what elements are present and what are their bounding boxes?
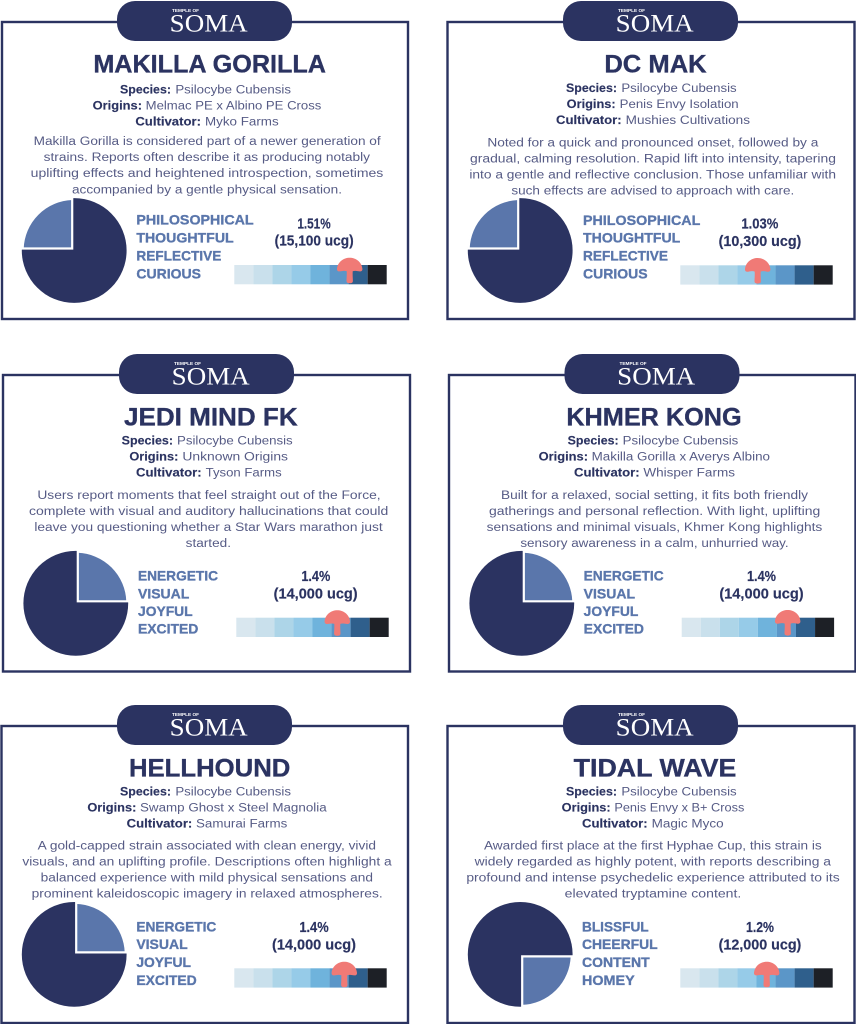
details: Psilocybe Cubensis bbox=[621, 785, 737, 799]
potency: (10,300 ucg) bbox=[719, 234, 802, 250]
effect tags: VISUAL bbox=[584, 585, 635, 601]
description: gradual, calming resolution. Rapid lift into intensity, tapering bbox=[470, 152, 836, 166]
details: Psilocybe Cubensis bbox=[623, 433, 738, 447]
description: prominent kaleidoscopic imagery in relaxed atmospheres. bbox=[32, 886, 383, 900]
effect tags: JOYFUL bbox=[136, 954, 191, 970]
title: KHMER KONG bbox=[566, 404, 742, 431]
details: Species: bbox=[120, 785, 171, 799]
logo: Temple of Soma: TEMPLE OF bbox=[174, 361, 201, 366]
description: Noted for a quick and pronounced onset, followed by a bbox=[487, 136, 818, 150]
icon: mushroom marker bbox=[754, 962, 779, 987]
effect tags: HOMEY bbox=[582, 972, 635, 988]
description: balanced experience with mild physical sensations and bbox=[41, 870, 373, 884]
description bbox=[22, 838, 392, 900]
effect tags bbox=[583, 212, 701, 281]
description: started. bbox=[186, 536, 231, 550]
logo: Temple of Soma: SOMA bbox=[617, 364, 695, 391]
description: gatherings and personal reflection. With light, uplifting bbox=[489, 504, 820, 518]
logo: Temple of Soma: SOMA bbox=[616, 11, 694, 38]
details bbox=[562, 785, 744, 831]
details: Mushies Cultivations bbox=[626, 113, 750, 127]
effect tags: REFLECTIVE bbox=[136, 248, 221, 264]
potency: 1.51% bbox=[297, 216, 331, 232]
details: Origins: bbox=[562, 801, 611, 815]
description: A gold-capped strain associated with clean energy, vivid bbox=[38, 838, 376, 852]
effect tags: VISUAL bbox=[138, 585, 190, 601]
pie chart bbox=[22, 902, 127, 1007]
details: Psilocybe Cubensis bbox=[177, 433, 293, 447]
details: Melmac PE x Albino PE Cross bbox=[146, 99, 321, 113]
details: Species: bbox=[568, 433, 619, 447]
logo: Temple of Soma: SOMA bbox=[170, 715, 248, 742]
effect tags: ENERGETIC bbox=[136, 918, 216, 934]
effect tags: REFLECTIVE bbox=[583, 248, 668, 264]
icon: mushroom marker bbox=[325, 610, 350, 636]
description: elevated tryptamine content. bbox=[565, 886, 741, 900]
details: Origins: bbox=[539, 449, 588, 463]
description bbox=[487, 488, 822, 550]
effect tags: CURIOUS bbox=[136, 265, 201, 281]
potency: (15,100 ucg) bbox=[275, 234, 354, 250]
pie chart bbox=[468, 902, 573, 1007]
effect tags: VISUAL bbox=[136, 936, 188, 952]
card border bbox=[3, 375, 410, 672]
details: Unknown Origins bbox=[182, 449, 288, 463]
panel: Khmer Kong bbox=[449, 354, 856, 672]
potency bbox=[719, 217, 802, 250]
logo: Temple of Soma bbox=[117, 705, 292, 745]
effect tags: JOYFUL bbox=[584, 603, 639, 619]
details: Swamp Ghost x Steel Magnolia bbox=[140, 801, 327, 815]
details: Psilocybe Cubensis bbox=[621, 81, 737, 95]
details: Psilocybe Cubensis bbox=[175, 785, 291, 799]
potency: 1.4% bbox=[747, 569, 776, 585]
effect tags: BLISSFUL bbox=[582, 918, 649, 934]
details: Penis Envy Isolation bbox=[620, 97, 739, 111]
details: Cultivator: bbox=[582, 817, 648, 831]
effect tags bbox=[136, 212, 254, 281]
card border bbox=[2, 726, 408, 1023]
logo: Temple of Soma: TEMPLE OF bbox=[618, 8, 645, 13]
effect tags: JOYFUL bbox=[138, 603, 193, 619]
details: Samurai Farms bbox=[196, 817, 287, 831]
effect tags: EXCITED bbox=[584, 621, 644, 637]
panel: Tidal Wave bbox=[448, 705, 854, 1023]
panel: Jedi Mind FK bbox=[3, 354, 410, 672]
card text bbox=[466, 755, 840, 988]
logo: Temple of Soma bbox=[563, 1, 738, 41]
details: Cultivator: bbox=[127, 817, 192, 831]
details: Origins: bbox=[129, 449, 178, 463]
potency scale bbox=[680, 968, 833, 988]
potency: 1.03% bbox=[741, 217, 779, 233]
pie chart bbox=[22, 198, 127, 303]
description: sensory awareness in a calm, unhurried way. bbox=[520, 536, 789, 550]
panel: Makilla Gorilla bbox=[2, 1, 408, 319]
potency bbox=[274, 569, 358, 602]
potency scale bbox=[234, 265, 387, 284]
potency scale bbox=[680, 265, 833, 285]
logo: Temple of Soma: TEMPLE OF bbox=[618, 712, 645, 717]
description: Makilla Gorilla is considered part of a newer generation of bbox=[34, 134, 381, 148]
potency scale bbox=[236, 618, 389, 637]
details: Whisper Farms bbox=[643, 465, 735, 479]
icon: mushroom marker bbox=[775, 610, 800, 636]
description: widely regarded as highly potent, with reports describing a bbox=[474, 854, 831, 868]
details: Cultivator: bbox=[136, 465, 202, 479]
details bbox=[93, 83, 321, 129]
description: visuals, and an uplifting profile. Descriptions often highlight a bbox=[22, 854, 392, 868]
potency bbox=[275, 216, 354, 250]
description: strains. Reports often describe it as producing notably bbox=[44, 150, 371, 164]
logo: Temple of Soma: TEMPLE OF bbox=[620, 361, 647, 366]
card border bbox=[449, 375, 856, 672]
potency scale bbox=[234, 968, 387, 988]
potency: (14,000 ucg) bbox=[719, 586, 804, 602]
icon: mushroom marker bbox=[337, 258, 362, 283]
effect tags: ENERGETIC bbox=[584, 567, 664, 583]
logo: Temple of Soma: TEMPLE OF bbox=[172, 8, 199, 13]
icon: mushroom marker bbox=[745, 258, 770, 284]
potency: (14,000 ucg) bbox=[274, 586, 358, 602]
effect tags bbox=[584, 567, 664, 637]
logo: Temple of Soma bbox=[117, 1, 292, 41]
details: Makilla Gorilla x Averys Albino bbox=[592, 449, 770, 463]
potency scale bbox=[682, 618, 834, 637]
details: Cultivator: bbox=[556, 113, 622, 127]
description bbox=[469, 136, 836, 198]
card border bbox=[448, 726, 854, 1023]
description: sensations and minimal visuals, Khmer Kong highlights bbox=[487, 520, 822, 534]
description: profound and intense psychedelic experience attributed to its bbox=[466, 870, 840, 884]
description: Users report moments that feel straight out of the Force, bbox=[37, 488, 381, 502]
card border bbox=[2, 22, 408, 319]
description bbox=[31, 134, 383, 196]
description bbox=[466, 838, 840, 900]
card text bbox=[487, 404, 822, 637]
description: such effects are advised to approach with care. bbox=[511, 184, 794, 198]
details: Cultivator: bbox=[135, 115, 201, 129]
potency: (14,000 ucg) bbox=[272, 937, 356, 953]
effect tags bbox=[136, 918, 216, 988]
potency bbox=[719, 920, 802, 953]
card text bbox=[22, 755, 392, 988]
details: Species: bbox=[120, 83, 171, 97]
logo: Temple of Soma bbox=[563, 705, 738, 745]
logo: Temple of Soma bbox=[564, 354, 740, 394]
potency bbox=[272, 920, 356, 953]
effect tags: ENERGETIC bbox=[138, 567, 218, 583]
title: TIDAL WAVE bbox=[574, 755, 736, 782]
description: uplifting effects and heightened introspection, sometimes bbox=[31, 166, 383, 180]
card border bbox=[448, 22, 854, 319]
icon: mushroom marker bbox=[332, 962, 357, 987]
details: Origins: bbox=[93, 99, 142, 113]
description: accompanied by a gentle physical sensation. bbox=[72, 182, 342, 196]
title: HELLHOUND bbox=[129, 755, 290, 782]
logo: Temple of Soma: TEMPLE OF bbox=[172, 712, 199, 717]
details: Species: bbox=[566, 785, 617, 799]
details: Myko Farms bbox=[205, 115, 279, 129]
effect tags: EXCITED bbox=[136, 972, 197, 988]
description: Awarded first place at the first Hyphae Cup, this strain is bbox=[484, 838, 822, 852]
potency: 1.4% bbox=[299, 920, 329, 936]
potency: (12,000 ucg) bbox=[719, 937, 802, 953]
logo: Temple of Soma: SOMA bbox=[172, 364, 250, 391]
pie chart bbox=[469, 551, 574, 656]
logo: Temple of Soma: SOMA bbox=[616, 715, 694, 742]
details bbox=[87, 785, 327, 831]
effect tags: CURIOUS bbox=[583, 265, 648, 281]
title: JEDI MIND FK bbox=[124, 404, 298, 431]
card text bbox=[469, 52, 836, 281]
potency: 1.4% bbox=[301, 569, 331, 585]
effect tags: THOUGHTFUL bbox=[136, 230, 234, 246]
logo: Temple of Soma bbox=[119, 354, 294, 394]
effect tags: PHILOSOPHICAL bbox=[136, 212, 254, 228]
effect tags bbox=[582, 918, 658, 988]
effect tags: EXCITED bbox=[138, 621, 198, 637]
effect tags: CHEERFUL bbox=[582, 936, 658, 952]
details: Cultivator: bbox=[574, 465, 640, 479]
card text bbox=[31, 52, 383, 281]
pie chart bbox=[23, 551, 128, 656]
details: Tyson Farms bbox=[206, 465, 282, 479]
title: DC MAK bbox=[604, 52, 707, 79]
logo: Temple of Soma: SOMA bbox=[170, 11, 248, 38]
panel: Hellhound bbox=[2, 705, 408, 1023]
details bbox=[122, 433, 293, 479]
details: Species: bbox=[122, 433, 173, 447]
details: Psilocybe Cubensis bbox=[175, 83, 291, 97]
potency bbox=[719, 569, 804, 602]
details: Magic Myco bbox=[652, 817, 724, 831]
details: Origins: bbox=[87, 801, 136, 815]
pie chart bbox=[468, 198, 573, 303]
effect tags: PHILOSOPHICAL bbox=[583, 212, 701, 228]
description: into a gentle and reflective conclusion. Those unfamiliar with bbox=[469, 168, 836, 182]
effect tags bbox=[138, 567, 218, 637]
description: leave you questioning whether a Star Wars marathon just bbox=[34, 520, 383, 534]
details bbox=[539, 433, 770, 479]
description bbox=[29, 488, 388, 550]
card text bbox=[29, 404, 388, 637]
effect tags: THOUGHTFUL bbox=[583, 230, 681, 246]
description: Built for a relaxed, social setting, it fits both friendly bbox=[501, 488, 809, 502]
description: complete with visual and auditory hallucinations that could bbox=[29, 504, 388, 518]
details: Origins: bbox=[567, 97, 616, 111]
details: Species: bbox=[566, 81, 617, 95]
panel: DC Mak bbox=[448, 1, 854, 319]
effect tags: CONTENT bbox=[582, 954, 650, 970]
potency: 1.2% bbox=[746, 920, 774, 936]
details: Penis Envy x B+ Cross bbox=[614, 801, 744, 815]
details bbox=[556, 81, 750, 127]
title: MAKILLA GORILLA bbox=[93, 52, 326, 79]
